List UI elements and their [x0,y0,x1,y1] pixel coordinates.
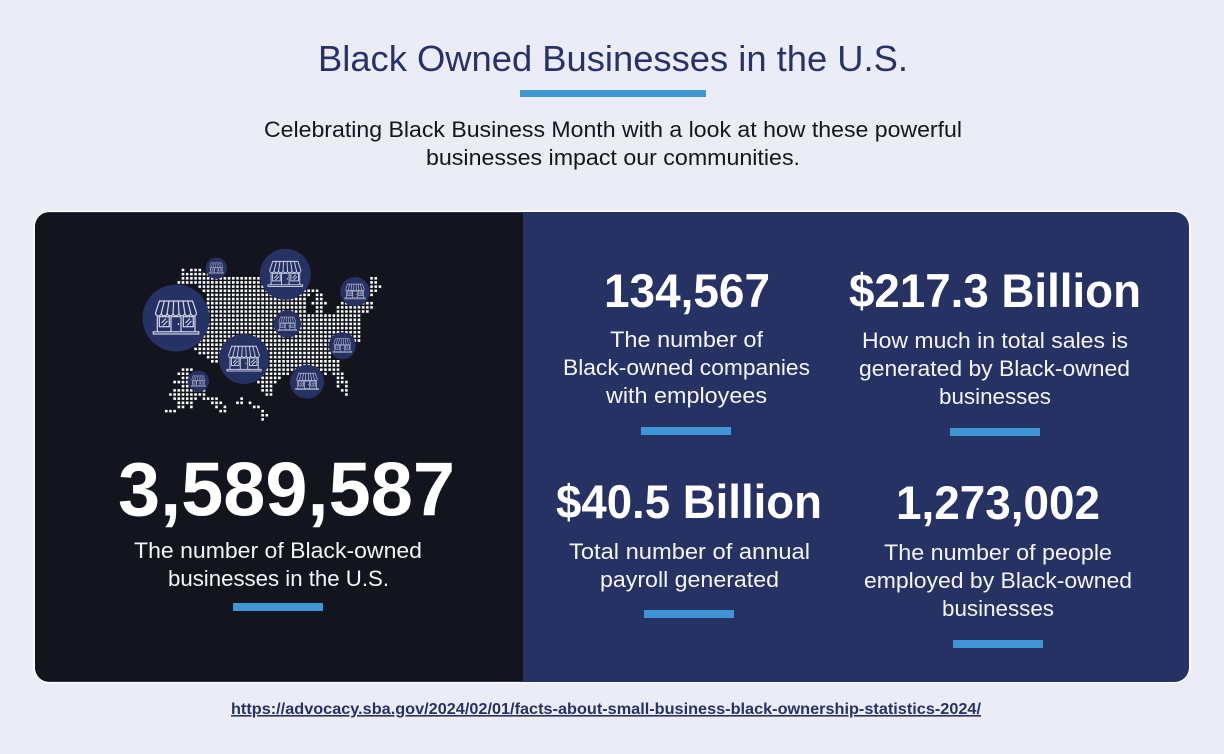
icon: store [274,310,301,338]
stat: people employed [864,476,1132,648]
map of the U.S. with store icons [142,249,380,419]
source link: https://advocacy.sba.gov/2024/02/01/facts-about-small-business-black-ownership-statistics-2024/ [231,701,982,718]
accent bar [233,603,323,611]
icon: store [340,277,370,306]
subtitle: Celebrating Black Business Month with a look at how these powerful [264,117,962,142]
stat: total sales: businesses [939,384,1051,409]
stat: people employed: businesses [942,596,1054,621]
stat: total sales [849,264,1141,436]
description: businesses in the U.S. [168,566,389,591]
subtitle: businesses impact our communities. [426,145,800,170]
icon: small store [206,258,227,279]
panel: main card [33,211,1191,683]
panel: total businesses [118,249,455,611]
icon: store [329,332,356,359]
stat: annual payroll: Total number of annual [569,539,810,564]
stat: total sales: How much in total sales is [862,328,1128,353]
stat: annual payroll: $40.5 Billion [556,475,822,528]
stat: people employed: employed by Black-owned [864,568,1132,593]
stat: companies with employees: The number of [610,327,764,352]
icon: store [290,365,324,399]
subtitle [264,117,962,170]
icon: small store [188,371,209,392]
title underline [520,90,706,97]
stat: companies with employees: Black-owned companies [563,355,810,380]
icon: store [260,249,311,300]
icon: large store [142,284,210,352]
stat: companies with employees: 134,567 [604,264,770,317]
big number: 3,589,587 [118,448,455,532]
description: The number of Black-owned [134,538,422,563]
description [134,538,422,591]
stat: annual payroll: payroll generated [600,567,779,592]
stat: people employed: 1,273,002 [896,476,1100,529]
icon: store [219,334,269,384]
stat: annual payroll [556,475,822,618]
stat: companies with employees [563,264,810,435]
title: Black Owned Businesses in the U.S. [318,38,908,79]
stat: total sales: $217.3 Billion [849,264,1141,317]
stat: people employed: The number of people [884,540,1112,565]
stat: companies with employees: with employees [605,383,767,408]
dotted U.S. map [166,270,380,419]
stat: total sales: generated by Black-owned [859,356,1130,381]
